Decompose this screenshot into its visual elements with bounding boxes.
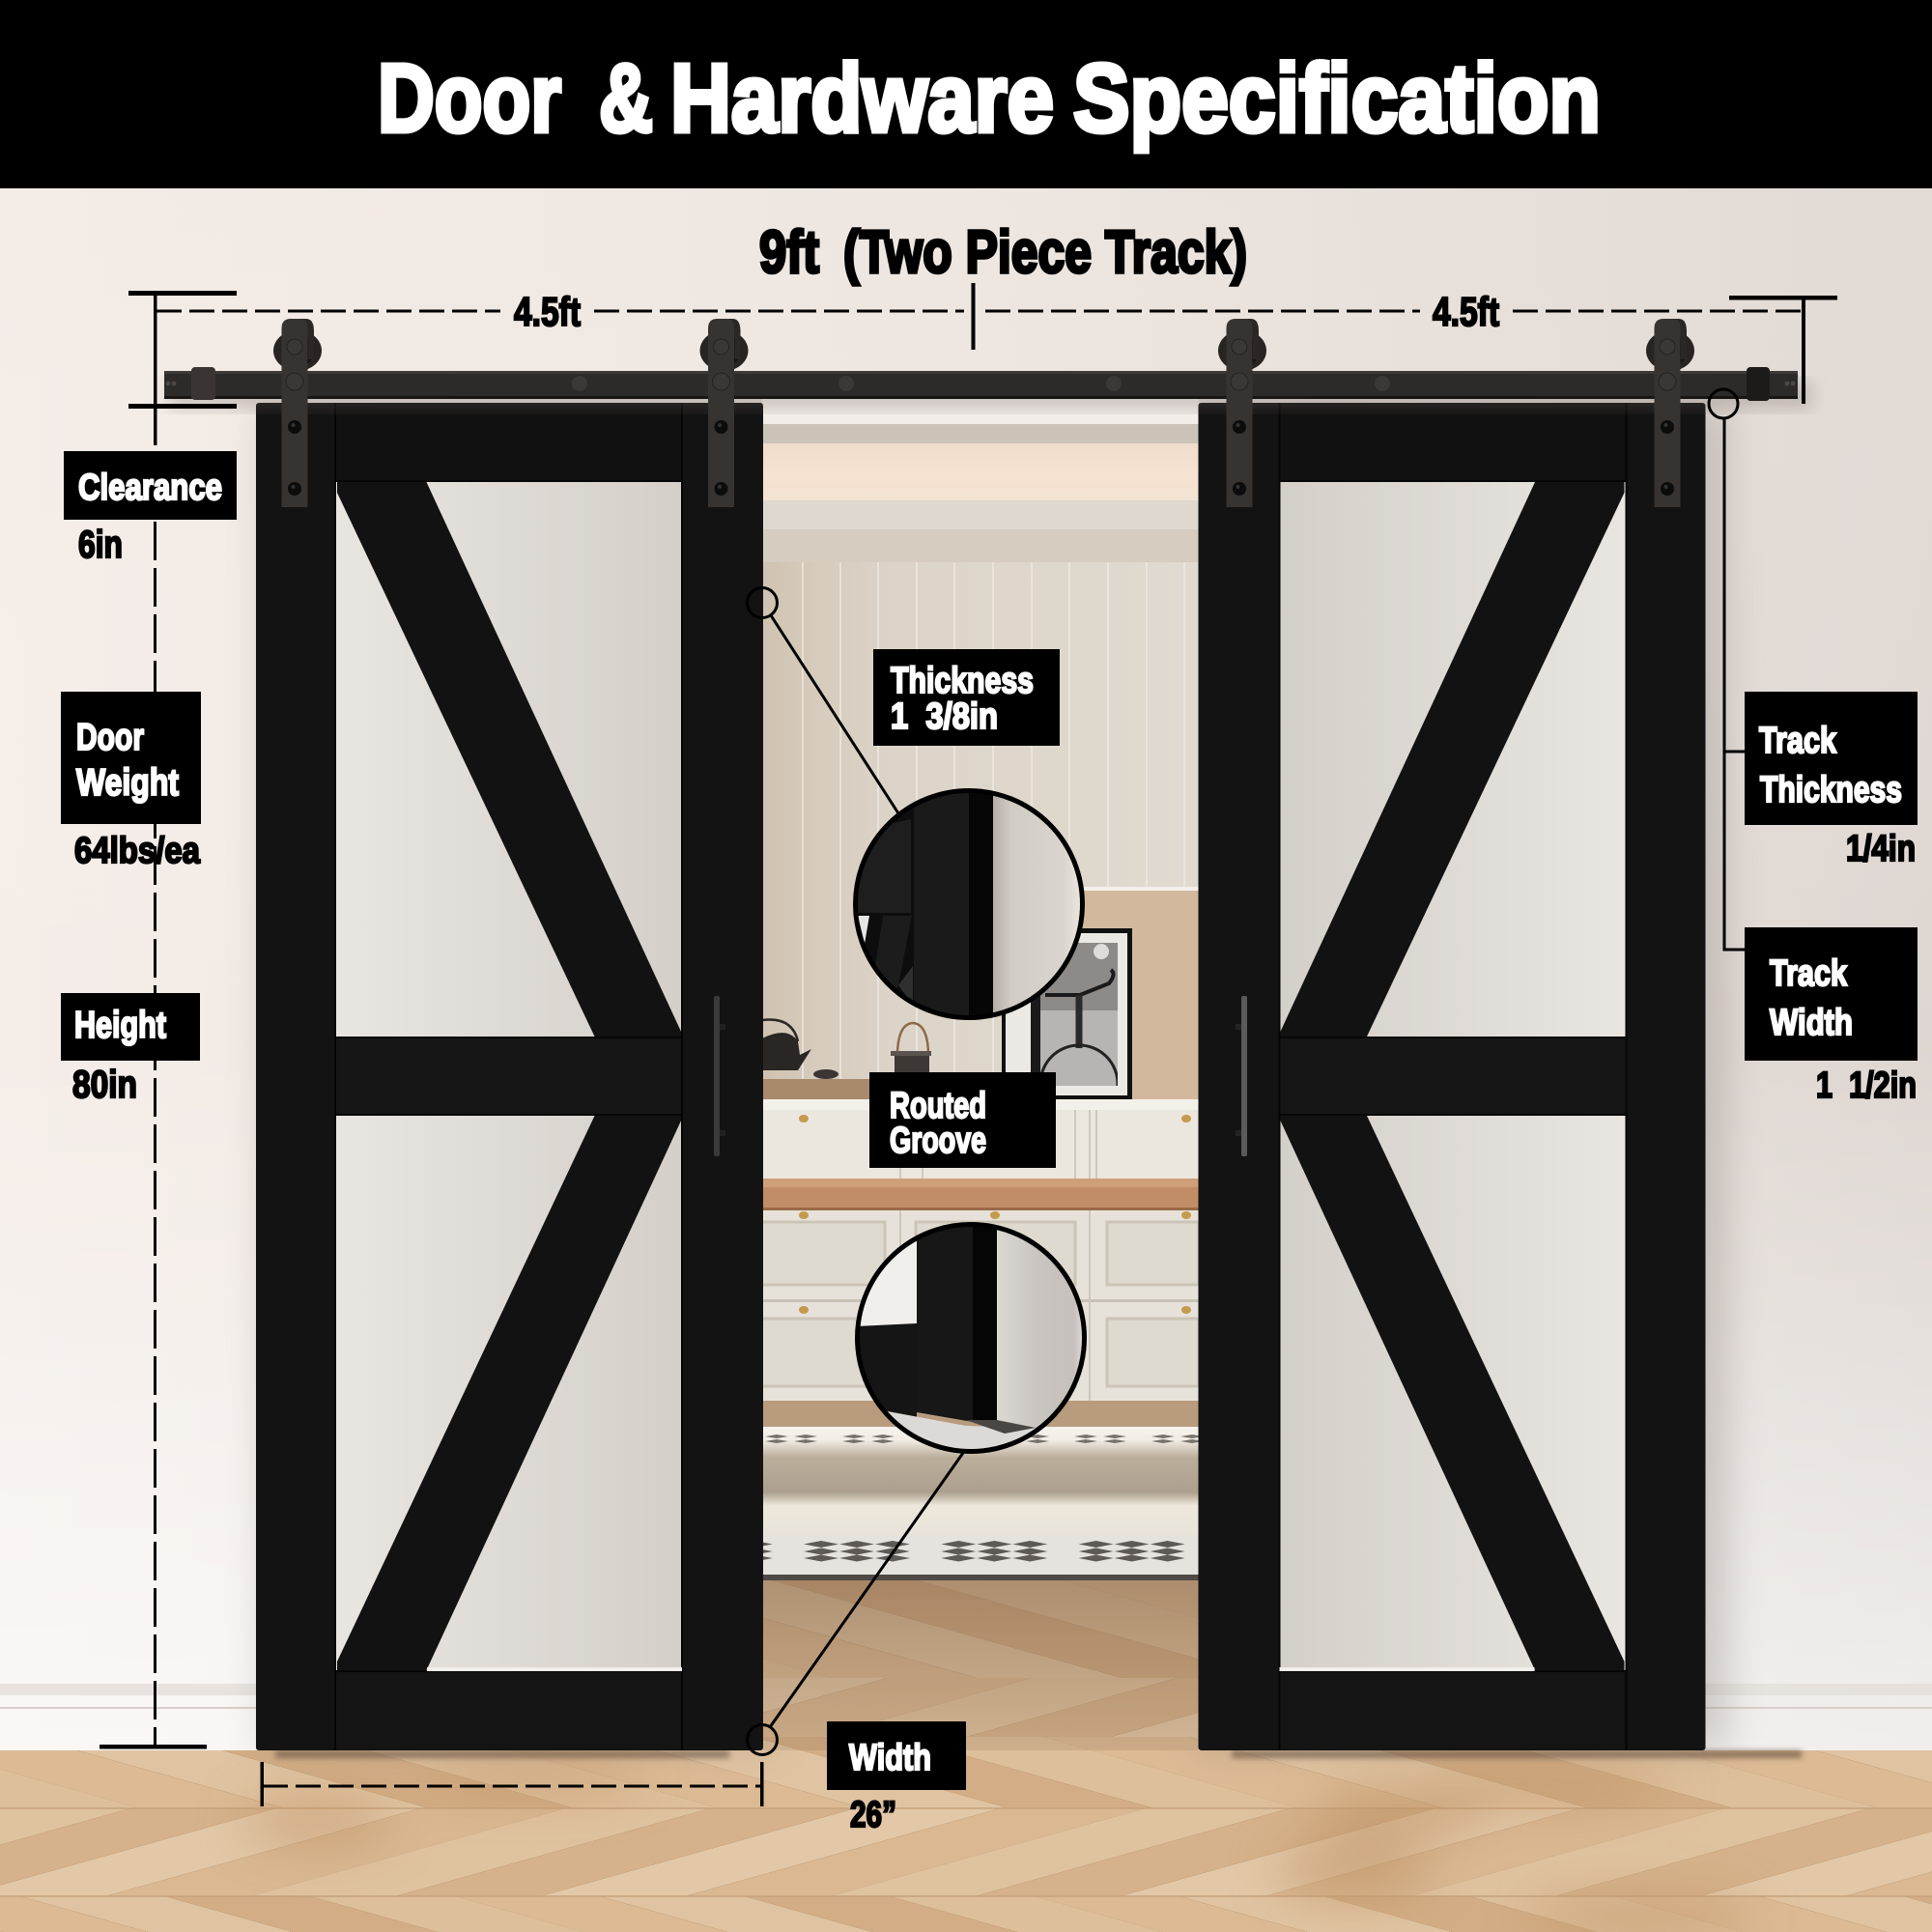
lower cabinets	[748, 1210, 1199, 1401]
track thickness callout: Track	[1759, 721, 1837, 761]
width value: 26”	[850, 1795, 896, 1835]
magnifier: routed groove	[856, 1222, 1088, 1454]
thickness callout	[873, 649, 1060, 746]
rail shadow	[169, 382, 1811, 409]
brass knobs	[799, 1115, 1191, 1314]
title: Hardware	[670, 44, 1054, 153]
height callout: Height	[74, 1005, 166, 1046]
rug	[762, 1401, 1199, 1580]
height value: 80in	[72, 1064, 137, 1106]
track thickness callout	[1745, 692, 1918, 869]
dimension: track span	[156, 283, 1802, 350]
track length heading	[759, 219, 1247, 286]
track pointer and leaders	[1709, 389, 1745, 950]
thickness callout: 1 3/8in	[891, 696, 998, 737]
door handle: right	[1236, 996, 1247, 1156]
dimension: height dashed line	[154, 522, 156, 1747]
thickness callout: Thickness	[891, 661, 1034, 701]
track length heading: (Two Piece Track)	[843, 219, 1247, 286]
pointer: thickness	[748, 587, 898, 813]
clearance callout: Clearance	[78, 468, 222, 508]
interior scene through opening	[748, 399, 1199, 1750]
teapot right	[891, 1023, 931, 1074]
track stop: left	[191, 367, 215, 400]
width callout: Width	[849, 1738, 931, 1778]
upper cabinets	[762, 1099, 1199, 1179]
track width callout	[1745, 927, 1918, 1106]
track width callout: Track	[1770, 953, 1848, 994]
interior floor	[762, 1580, 1199, 1750]
track stop: right	[1747, 367, 1770, 401]
title: &	[599, 44, 653, 153]
clearance value: 6in	[78, 524, 123, 566]
framed picture	[1002, 928, 1132, 1099]
door weight callout: Door	[76, 717, 144, 758]
hanger 4	[1646, 319, 1694, 507]
hanger 3	[1218, 319, 1266, 507]
teapot left	[762, 1019, 838, 1079]
door weight callout: Weight	[76, 762, 179, 804]
track length heading: 9ft	[759, 219, 819, 286]
header bar	[0, 0, 1932, 188]
door shadows on floor	[275, 1750, 1802, 1758]
door weight value: 64lbs/ea	[74, 831, 201, 871]
magnifier: door thickness	[854, 790, 1086, 1022]
wood floor	[0, 1750, 1932, 1932]
track thickness value: 1/4in	[1846, 829, 1916, 869]
hanger 2	[699, 319, 748, 507]
label: 4.5ft right: 4.5ft	[1433, 289, 1499, 334]
clearance callout	[64, 451, 237, 566]
wood counter	[762, 1179, 1199, 1210]
dimension: height floor tick	[99, 1745, 207, 1748]
wood tray	[762, 1079, 873, 1099]
door shadows on wall	[261, 406, 1729, 1748]
label: 4.5ft left: 4.5ft	[514, 289, 581, 334]
pointer: width	[748, 1453, 963, 1754]
routed groove callout: Groove	[890, 1121, 986, 1161]
title	[378, 44, 1601, 153]
routed groove callout: Routed	[890, 1086, 986, 1126]
dimension: clearance ticks	[128, 291, 237, 445]
dimension: right track tick	[1729, 296, 1837, 404]
dimension: door width	[261, 1762, 763, 1806]
track rail	[164, 371, 1798, 399]
door handle: left	[714, 996, 725, 1156]
hanger 1	[273, 319, 322, 507]
routed groove callout	[869, 1072, 1056, 1168]
door weight callout	[61, 692, 201, 871]
title: Specification	[1073, 44, 1601, 153]
title: Door	[378, 44, 561, 153]
track width callout: Width	[1770, 1003, 1853, 1043]
width callout	[827, 1721, 966, 1835]
height callout	[61, 993, 200, 1106]
barn door: right	[1198, 403, 1706, 1750]
barn door: left	[256, 403, 763, 1750]
